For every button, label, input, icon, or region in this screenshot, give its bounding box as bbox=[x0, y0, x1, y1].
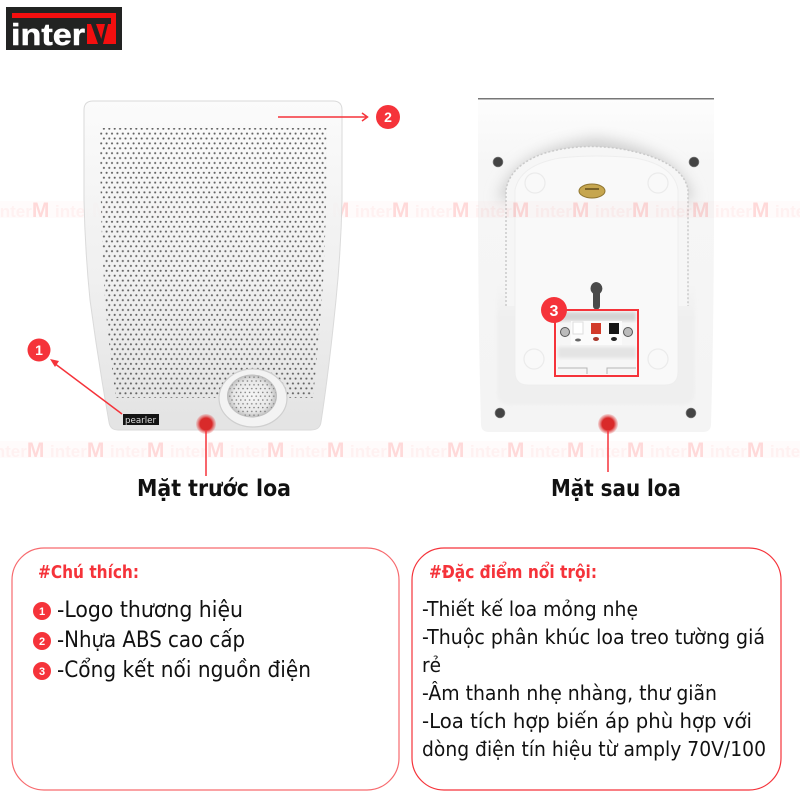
watermark strip: upper: interM bbox=[235, 199, 289, 222]
watermark strip: upper: interM bbox=[715, 199, 769, 222]
watermark strip: lower: interM bbox=[290, 439, 344, 462]
marker 3: 3 bbox=[550, 303, 559, 320]
watermark strip: upper: interM bbox=[535, 199, 589, 222]
watermark strip: upper: interM bbox=[355, 199, 409, 222]
panel outline: features bbox=[412, 548, 781, 790]
speaker front grille bbox=[100, 128, 327, 398]
panel: features bbox=[412, 548, 781, 790]
heading: features: #Đặc điểm nổi trội: bbox=[429, 561, 597, 583]
panel outline: notes bbox=[12, 548, 399, 790]
marker 2: 2 bbox=[384, 109, 392, 125]
watermark strip: lower: interM bbox=[50, 439, 104, 462]
feature list bbox=[422, 597, 766, 761]
rear round marks bbox=[524, 173, 668, 369]
watermark strip: lower: interM bbox=[350, 439, 404, 462]
watermark strip: lower: interM bbox=[470, 439, 524, 462]
logo: InterM: inter bbox=[11, 17, 85, 52]
watermark strip: upper: interM bbox=[295, 199, 349, 222]
watermark strip: lower: interM bbox=[170, 439, 224, 462]
stitched mount outline bbox=[506, 146, 688, 306]
gold badge bbox=[579, 184, 605, 198]
speaker back body bbox=[478, 99, 714, 432]
marker 3 bbox=[541, 297, 567, 323]
rear inner plate bbox=[515, 156, 678, 385]
back pointer bbox=[598, 414, 618, 472]
watermark strip: lower: interM bbox=[230, 439, 284, 462]
keyhole bbox=[591, 282, 602, 310]
watermark strip: lower: interM bbox=[650, 439, 704, 462]
watermark strip: upper: interM bbox=[655, 199, 709, 222]
soft shadow above mount bbox=[498, 138, 694, 200]
top edge shadow bbox=[478, 98, 714, 100]
arrow to marker 2 bbox=[278, 113, 368, 121]
terminal recess bbox=[557, 312, 636, 374]
marker 1: 1 bbox=[35, 342, 43, 358]
feature list: -Loa tích hợp biến áp phù hợp với bbox=[422, 709, 752, 733]
brand badge: pearler bbox=[125, 416, 156, 426]
note 3: -Cổng kết nối nguồn điện bbox=[57, 658, 311, 683]
feature list: -Âm thanh nhẹ nhàng, thư giãn bbox=[422, 680, 717, 705]
watermark strip: lower: interM bbox=[110, 439, 164, 462]
tweeter ring bbox=[219, 369, 287, 427]
arrow to marker 1 bbox=[50, 359, 122, 414]
feature list: -Thiết kế loa mỏng nhẹ bbox=[422, 597, 638, 621]
watermark strip: lower: interM bbox=[530, 439, 584, 462]
watermark strip: upper: interM bbox=[55, 199, 109, 222]
caption: front: Mặt trước loa bbox=[137, 476, 291, 502]
note 2: -Nhựa ABS cao cấp bbox=[57, 628, 245, 653]
watermark strip: lower: interM bbox=[410, 439, 464, 462]
note 1: 1 bbox=[39, 606, 45, 618]
watermark strip: upper: interM bbox=[175, 199, 229, 222]
watermark strip: lower: interM bbox=[710, 439, 764, 462]
watermark strip: upper: interM bbox=[415, 199, 469, 222]
speaker back bbox=[478, 98, 714, 432]
speaker front body bbox=[84, 101, 342, 430]
terminal block bbox=[560, 321, 632, 345]
note 2: 2 bbox=[39, 636, 45, 648]
watermark strip: upper bbox=[0, 199, 800, 222]
watermark strip: upper: interM bbox=[595, 199, 649, 222]
highlight box: power connector bbox=[555, 310, 638, 376]
feature list: dòng điện tín hiệu từ amply 70V/100 bbox=[422, 737, 766, 761]
heading: notes: #Chú thích: bbox=[38, 562, 139, 583]
watermark strip: upper: interM bbox=[475, 199, 529, 222]
note 3: 3 bbox=[39, 666, 45, 678]
logo: InterM bbox=[6, 7, 122, 52]
rear raised panel bbox=[497, 280, 695, 405]
note 1: -Logo thương hiệu bbox=[57, 598, 243, 623]
feature list: -Thuộc phân khúc loa treo tường giá bbox=[422, 625, 765, 649]
watermark strip: lower bbox=[0, 439, 800, 462]
screws bbox=[493, 157, 699, 418]
front pointer bbox=[196, 414, 216, 476]
panel: notes bbox=[12, 548, 399, 790]
marker 2 bbox=[376, 105, 400, 129]
speaker front bbox=[84, 101, 342, 430]
watermark strip: lower: interM bbox=[590, 439, 644, 462]
marker 1 bbox=[28, 338, 50, 362]
caption: back: Mặt sau loa bbox=[551, 476, 681, 502]
watermark strip: upper: interM bbox=[115, 199, 169, 222]
feature list: rẻ bbox=[422, 653, 441, 677]
